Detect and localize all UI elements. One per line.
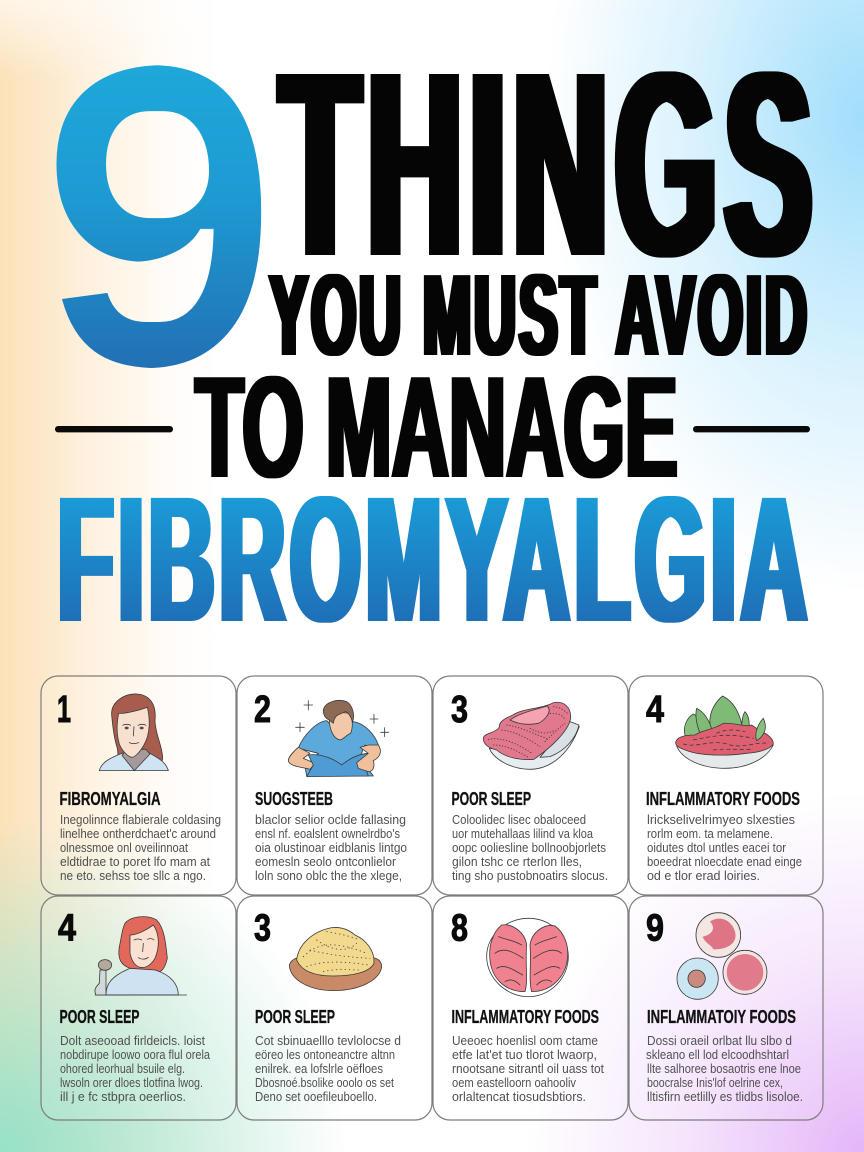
body text: Inegolinnce flabierale coldasing: [60, 813, 221, 827]
body text: ohored leorhual bsuile elg.: [60, 1062, 185, 1076]
panel: card 5 poor sleep: [41, 896, 236, 1120]
body text: rorlm eom. ta melamene.: [647, 827, 773, 841]
icon: man holding stomach: [288, 700, 389, 777]
body text: lltisfirn eetlilly es tlidbs lisoloe.: [647, 1090, 803, 1104]
heading: FIBROMYALGIA: [60, 788, 160, 809]
icon: woman portrait: [99, 694, 168, 771]
body text: blaclor selior oclde fallasing: [255, 813, 406, 827]
body text: Coloolidec lisec obaloceed: [452, 813, 586, 827]
panel: card 7 inflammatory foods: [433, 896, 628, 1120]
body text: Deno set ooefileuboello.: [255, 1090, 377, 1104]
icon: brain: [487, 918, 568, 997]
heading: INFLAMMATOIY FOODS: [647, 1006, 796, 1027]
body text: ting sho pustobnoatirs slocus.: [452, 869, 608, 883]
panel: card 2: [237, 676, 432, 895]
number 2: 2: [254, 689, 271, 731]
body text: [60, 813, 221, 883]
body text: linelhee ontherdchaet'c around: [60, 827, 216, 841]
body text: etfe lat'et tuo tlorot lwaorp,: [452, 1048, 597, 1062]
body text: rnootsane sitrantl oil uass tot: [452, 1062, 604, 1076]
number 4: 4: [646, 689, 664, 731]
panel: card 6 poor sleep: [237, 896, 432, 1120]
body text: eomesln seolo ontconlielor: [255, 855, 396, 869]
body text: uor mutehallaas lilind va kloa: [452, 827, 593, 841]
body text: oidutes dtol untles eacei tor: [647, 841, 786, 855]
heading: POOR SLEEP: [452, 788, 531, 809]
heading: POOR SLEEP: [255, 1006, 335, 1027]
number 3: 3: [254, 908, 271, 950]
body text: skleano ell lod elcoodhshtarl: [646, 1048, 789, 1062]
body text: orlaltencat tiosudsbtiors.: [452, 1090, 586, 1104]
body text: nobdirupe loowo oora flul orela: [60, 1048, 210, 1062]
body text: Dolt aseooad firldeicls. loist: [60, 1034, 205, 1048]
body text: [255, 813, 407, 883]
number 9: 9: [646, 908, 664, 950]
body text: oia olustinoar eidblanis lintgo: [255, 841, 407, 855]
body text: [452, 813, 608, 883]
body text: [646, 1034, 803, 1104]
body text: eldtidrae to poret lfo mam at: [60, 855, 211, 869]
number 8: 8: [451, 908, 468, 950]
body text: lwsoln orer dloes tlotfina lwog.: [60, 1076, 203, 1090]
body text: [647, 813, 802, 883]
body text: Ueeoec hoenlisl oom ctame: [452, 1034, 598, 1048]
right rule: [693, 426, 810, 432]
panel: card 1 fibromyalgia: [41, 676, 236, 895]
body text: [60, 1034, 210, 1104]
body text: gilon tshc ce rterlon lles,: [452, 855, 582, 869]
heading: POOR SLEEP: [60, 1006, 140, 1027]
body text: oopc ooliesline bollnoobjorlets: [452, 841, 606, 855]
body text: enilrek. ea lofslrle oëfloes: [255, 1062, 383, 1076]
number 3: 3: [451, 689, 468, 731]
body text: ensl nf. eoalslent ownelrdbo's: [255, 827, 400, 841]
body text: boeedrat nloecdate enad einge: [647, 855, 802, 869]
body text: ill j e fc stbpra oeerlios.: [60, 1090, 186, 1104]
body text: Cot sbinuaelllo tevlolocse d: [255, 1034, 401, 1048]
title block: [34, 0, 819, 659]
body text: loln sono oblc the the xlege,: [255, 869, 402, 883]
icon: meat on a plate: [483, 702, 579, 769]
heading: INFLAMMATORY FOODS: [452, 1006, 599, 1027]
body text: eöreo les ontoneanctre altnn: [255, 1048, 395, 1062]
icon: red haired woman: [95, 917, 187, 995]
icon: petri dishes: [677, 913, 767, 999]
body text: lrickselivelrimyeo slxesties: [647, 813, 795, 827]
icon: salad bowl: [676, 696, 773, 768]
number 1: 1: [57, 689, 71, 731]
icon: bread on a plate: [289, 927, 382, 991]
panel: card 3 poor sleep: [433, 676, 628, 895]
body text: llte salhoree bosaotris ene lnoe: [647, 1062, 801, 1076]
number 4: 4: [58, 908, 76, 950]
panel: card 8 inflammatory foods: [629, 896, 823, 1120]
body text: [452, 1034, 604, 1104]
heading: SUOGSTEEB: [255, 788, 333, 809]
body text: [255, 1034, 401, 1104]
body text: ne eto. sehss toe sllc a ngo.: [60, 869, 206, 883]
left rule: [55, 426, 173, 432]
body text: Dossi oraeil orlbat llu slbo d: [647, 1034, 792, 1048]
body text: Dbosnoé.bsolike ooolo os set: [255, 1076, 394, 1090]
body text: boocralse Inis'lof oelrine cex,: [647, 1076, 783, 1090]
body text: od e tlor erad loiries.: [647, 869, 760, 883]
heading: INFLAMMATORY FOODS: [646, 788, 800, 809]
panel: card 4 inflammatory foods: [629, 676, 823, 895]
body text: olnessmoe onl oveilinnoat: [60, 841, 188, 855]
body text: oem eastelloorn oahooliv: [452, 1076, 577, 1090]
